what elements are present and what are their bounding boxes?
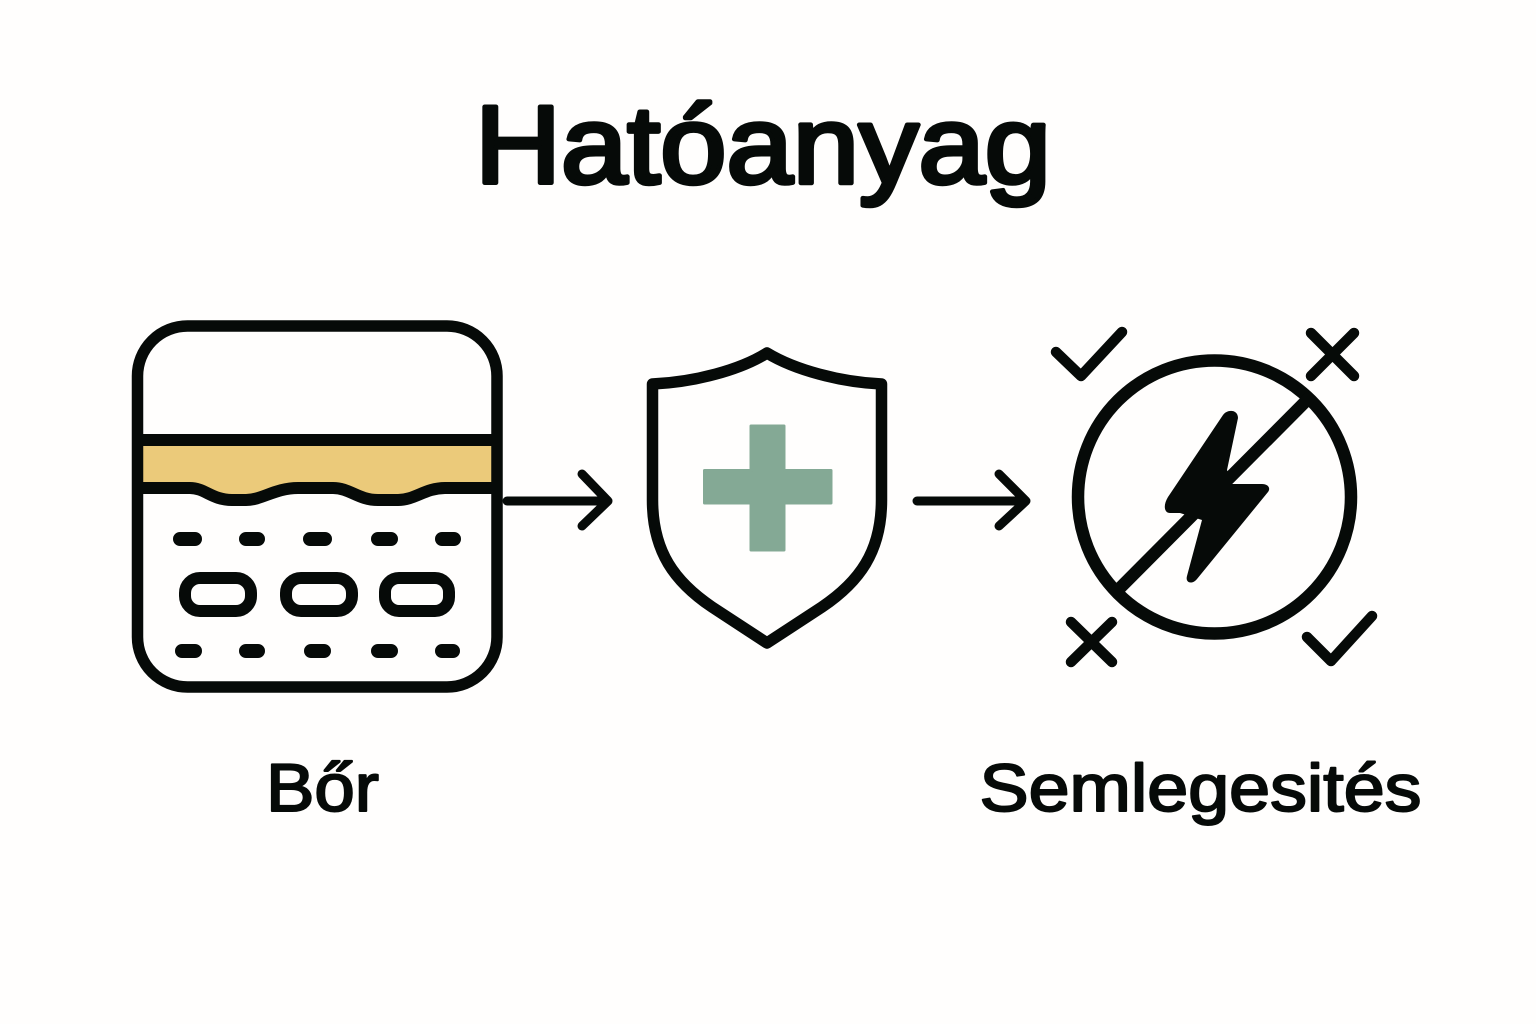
skin layer wavy line [138,488,497,500]
cross bottom left [1071,622,1112,662]
arrow: shield to neutralization [917,474,1026,526]
skin outline [138,326,497,687]
circle [1078,360,1351,634]
green cross [704,426,831,550]
lower dash row [182,644,453,658]
diagonal slash [1115,397,1310,593]
skin layer upper line [138,434,497,446]
title: Hatóanyag [475,84,1051,207]
check top left [1056,332,1122,376]
lightning bolt [1165,411,1269,583]
skin yellow layer [138,440,497,500]
icon: shield with cross [652,353,882,643]
cross top right [1311,333,1354,376]
icon: neutralization [1056,332,1372,662]
shield outline [652,353,882,643]
upper dash row [180,532,454,546]
label: neutralization: Semlegesités [980,751,1422,826]
skin cells [185,578,449,611]
label: skin: Bőr [266,750,379,826]
check bottom right [1307,616,1372,661]
arrow: skin to shield [507,474,608,526]
icon: skin layers [138,326,497,687]
